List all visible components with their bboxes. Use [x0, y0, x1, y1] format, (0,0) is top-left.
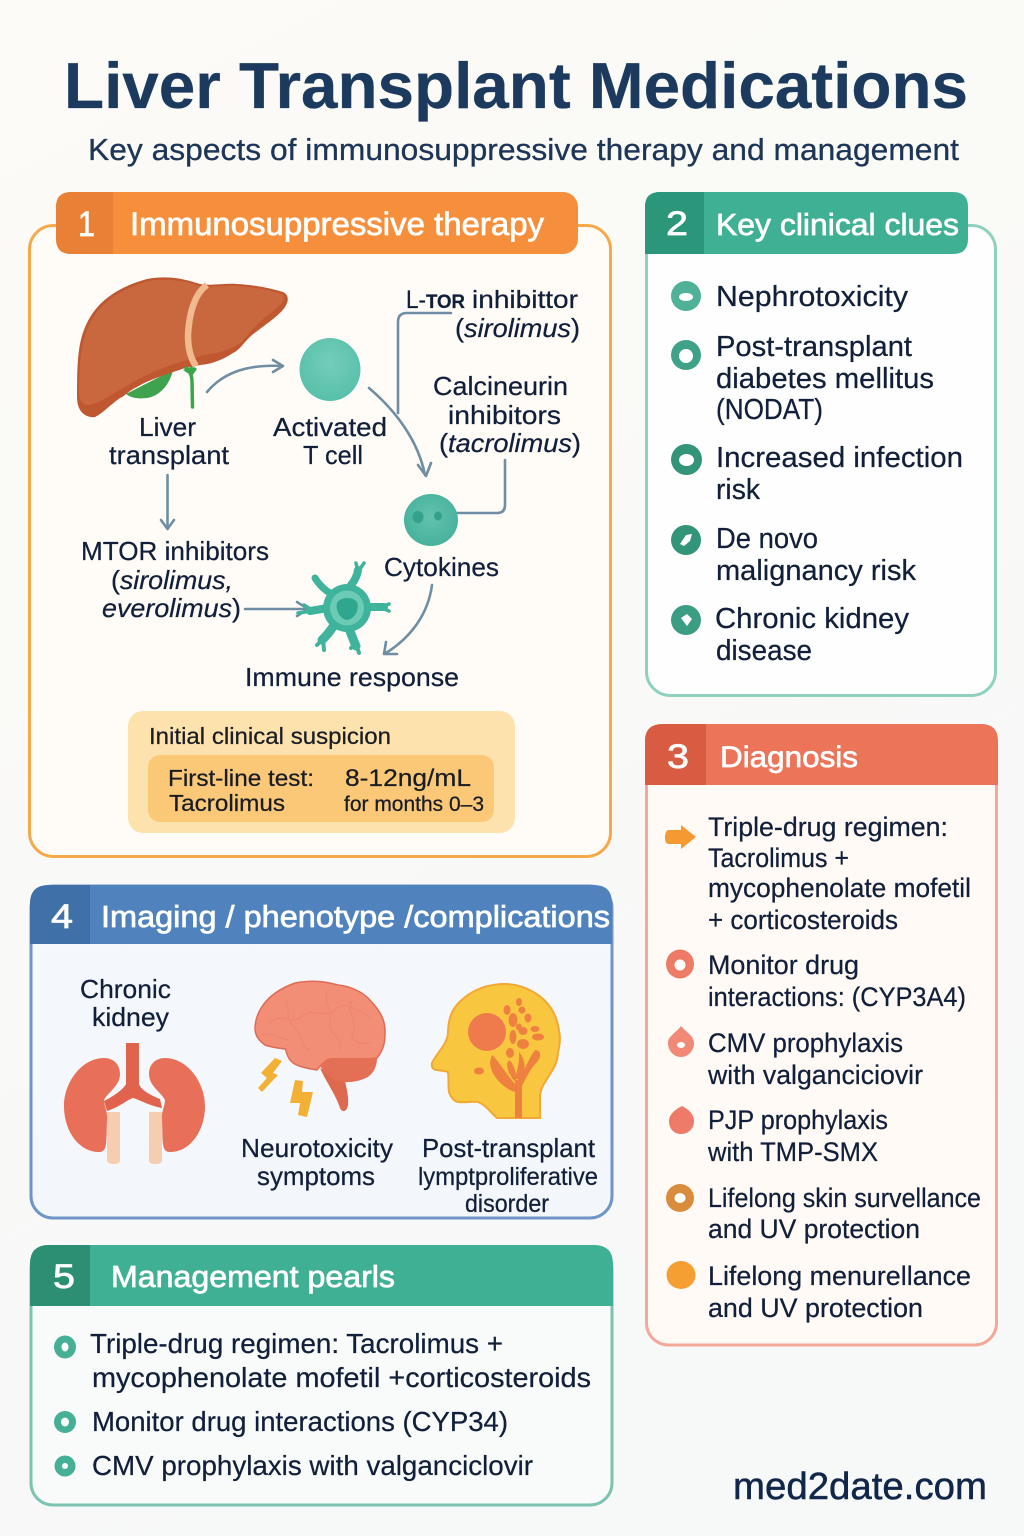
label: neurotoxicity symptoms: Neurotoxicity: [241, 1133, 393, 1163]
label: L-TOR inhibitor: L-: [406, 286, 426, 314]
list item: skin surveillance: [666, 1183, 981, 1244]
list item: skin surveillance: Lifelong skin survellance: [708, 1183, 981, 1213]
heading: imaging, phenotype, complications: [30, 885, 612, 944]
icon: cytokine cell: [404, 494, 458, 546]
list item: infection risk: risk: [716, 474, 760, 506]
heading: diagnosis: Diagnosis: [720, 741, 858, 774]
label: mTOR inhibitors: everolimus): [102, 593, 241, 623]
list item: triple-drug regimen: + corticosteroids: [708, 905, 898, 935]
heading: immunosuppressive therapy: [56, 192, 578, 254]
icon: liver: [77, 277, 288, 417]
panel: imaging, phenotype, complications: [30, 885, 612, 1218]
list item: infection risk: [671, 442, 963, 506]
website credit: med2date.com: [733, 1466, 987, 1508]
icon: activated T cell: [300, 338, 360, 401]
list item: triple-drug regimen: [665, 812, 971, 935]
label: L-TOR inhibitor: (sirolimus): [455, 313, 580, 343]
label: mTOR inhibitors: [81, 536, 269, 623]
list item: post-transplant diabetes: Post-transplant: [716, 331, 912, 363]
label: neurotoxicity symptoms: symptoms: [257, 1161, 375, 1191]
list item: malignancy risk: [671, 523, 916, 587]
list item: chronic kidney disease: disease: [716, 635, 812, 667]
list item: nephrotoxicity: Nephrotoxicity: [716, 281, 909, 313]
list item: PJP prophylaxis: [669, 1105, 888, 1167]
label: calcineurin inhibitors: (tacrolimus): [439, 428, 581, 458]
connector: L-TOR bracket: [398, 313, 451, 413]
label: L-TOR inhibitor: [406, 286, 580, 343]
heading: management pearls: Management pearls: [111, 1259, 395, 1294]
label: L-TOR inhibitor: TOR: [426, 292, 465, 313]
icon: brain with lightning: [255, 981, 385, 1117]
list item: monitor drug interactions: Monitor drug: [708, 950, 859, 980]
label: cytokines: Cytokines: [384, 552, 499, 582]
icon: head with lymphoproliferative tree: [432, 984, 560, 1118]
label: neurotoxicity symptoms: [241, 1133, 393, 1191]
label: mTOR inhibitors: (sirolimus,: [111, 565, 233, 595]
list item: post-transplant diabetes: (NODAT): [716, 394, 823, 426]
list item: lifelong protection: Lifelong menurellance: [708, 1261, 971, 1291]
heading: immunosuppressive therapy: Immunosuppressive therapy: [130, 206, 544, 242]
list item: malignancy risk: De novo: [716, 523, 818, 555]
list item: lifelong protection: [666, 1261, 971, 1323]
callout: first-line test: for months 0–3: [344, 793, 484, 816]
list item: skin surveillance: and UV protection: [708, 1214, 920, 1244]
label: mTOR inhibitors: MTOR inhibitors: [81, 536, 269, 566]
arrow: T cell to cytokines: [369, 388, 431, 476]
list item: infection risk: Increased infection: [716, 442, 963, 474]
panel: key clinical clues: [645, 192, 996, 696]
label: activated T cell: Activated: [273, 412, 387, 442]
list item: malignancy risk: malignancy risk: [716, 555, 916, 587]
list item: monitor drug interactions: [666, 950, 966, 1012]
callout: first-line test: [148, 755, 494, 822]
list item: chronic kidney disease: Chronic kidney: [715, 603, 909, 635]
label: post-transplant lymphoproliferative disorder: Post-transplant: [422, 1133, 596, 1163]
arrow: liver to T cell: [207, 360, 283, 392]
list item: triple-drug regimen: mycophenolate mofetil +corticosteroids: [92, 1362, 591, 1393]
label: calcineurin inhibitors: Calcineurin: [433, 371, 568, 401]
list item: lifelong protection: and UV protection: [708, 1293, 923, 1323]
heading: diagnosis: [645, 724, 998, 785]
list item: triple-drug regimen: Triple-drug regimen:: [708, 812, 948, 842]
list item: post-transplant diabetes: [671, 331, 934, 426]
label: liver transplant: Liver: [139, 412, 196, 442]
list item: CMV prophylaxis: with valganciciovir: [707, 1060, 923, 1090]
label: liver transplant: [109, 412, 230, 470]
panel: diagnosis: [645, 724, 998, 1345]
label: activated T cell: [273, 412, 387, 470]
label: immune response: Immune response: [245, 662, 459, 692]
list item: triple-drug regimen: Triple-drug regimen: Tacrolimus +: [90, 1328, 503, 1359]
arrow: mTOR to immune cell: [245, 602, 308, 616]
label: calcineurin inhibitors: [433, 371, 581, 458]
icon: immune cell: [298, 563, 389, 653]
callout: initial clinical suspicion: [128, 711, 515, 833]
arrow: cytokines to immune response: [384, 585, 432, 654]
heading: key clinical clues: Key clinical clues: [716, 207, 959, 242]
connector: calcineurin bracket: [457, 460, 505, 513]
list item: CMV prophylaxis: [668, 1026, 923, 1090]
callout: first-line test: 8-12ng/mL: [345, 765, 471, 792]
heading: key clinical clues: [645, 192, 968, 254]
list item: triple-drug regimen: [54, 1328, 591, 1393]
title: Liver Transplant Medications: [64, 49, 968, 122]
label: calcineurin inhibitors: inhibitors: [448, 400, 561, 430]
label: chronic kidney: [80, 974, 171, 1032]
list item: triple-drug regimen: Tacrolimus +: [708, 843, 849, 873]
heading: management pearls: [30, 1245, 613, 1306]
callout: first-line test: First-line test:: [168, 765, 314, 791]
list item: monitor drug interactions: interactions: (CYP3A4): [708, 982, 966, 1012]
label: post-transplant lymphoproliferative disorder: disorder: [465, 1190, 549, 1218]
heading: diagnosis: 3: [667, 738, 689, 776]
arrow: transplant to mTOR: [161, 475, 174, 529]
label: L-TOR inhibitor: inhibittor: [472, 286, 578, 314]
subtitle: Key aspects of immunosuppressive therapy and management: [88, 132, 959, 167]
label: post-transplant lymphoproliferative disorder: lymptproliferative: [418, 1163, 598, 1191]
label: chronic kidney: Chronic: [80, 974, 171, 1004]
list item: post-transplant diabetes: diabetes mellitus: [716, 363, 934, 395]
heading: management pearls: 5: [53, 1258, 75, 1296]
label: liver transplant: transplant: [109, 440, 230, 470]
panel: immunosuppressive therapy: [30, 192, 610, 856]
list item: CMV prophylaxis: CMV prophylaxis with valganciclovir: [92, 1450, 533, 1481]
heading: immunosuppressive therapy: 1: [78, 205, 95, 244]
list item: CMV prophylaxis: CMV prophylaxis: [708, 1028, 903, 1058]
list item: monitor drug interactions: Monitor drug interactions (CYP34): [92, 1406, 508, 1437]
label: post-transplant lymphoproliferative disorder: [418, 1133, 598, 1218]
label: chronic kidney: kidney: [92, 1002, 169, 1032]
list item: PJP prophylaxis: with TMP-SMX: [707, 1137, 878, 1167]
callout: first-line test: Tacrolimus: [169, 790, 285, 816]
list item: triple-drug regimen: mycophenolate mofetil: [708, 873, 971, 903]
list item: chronic kidney disease: [671, 603, 909, 667]
heading: key clinical clues: 2: [666, 205, 688, 243]
label: activated T cell: T cell: [303, 440, 363, 470]
heading: imaging, phenotype, complications: Imaging / phenotype /complications: [101, 899, 610, 934]
icon: kidneys: [64, 1043, 205, 1164]
list item: PJP prophylaxis: PJP prophylaxis: [708, 1105, 888, 1135]
callout: initial clinical suspicion: Initial clinical suspicion: [149, 723, 391, 749]
panel: management pearls: [30, 1245, 613, 1505]
heading: imaging, phenotype, complications: 4: [51, 898, 73, 936]
